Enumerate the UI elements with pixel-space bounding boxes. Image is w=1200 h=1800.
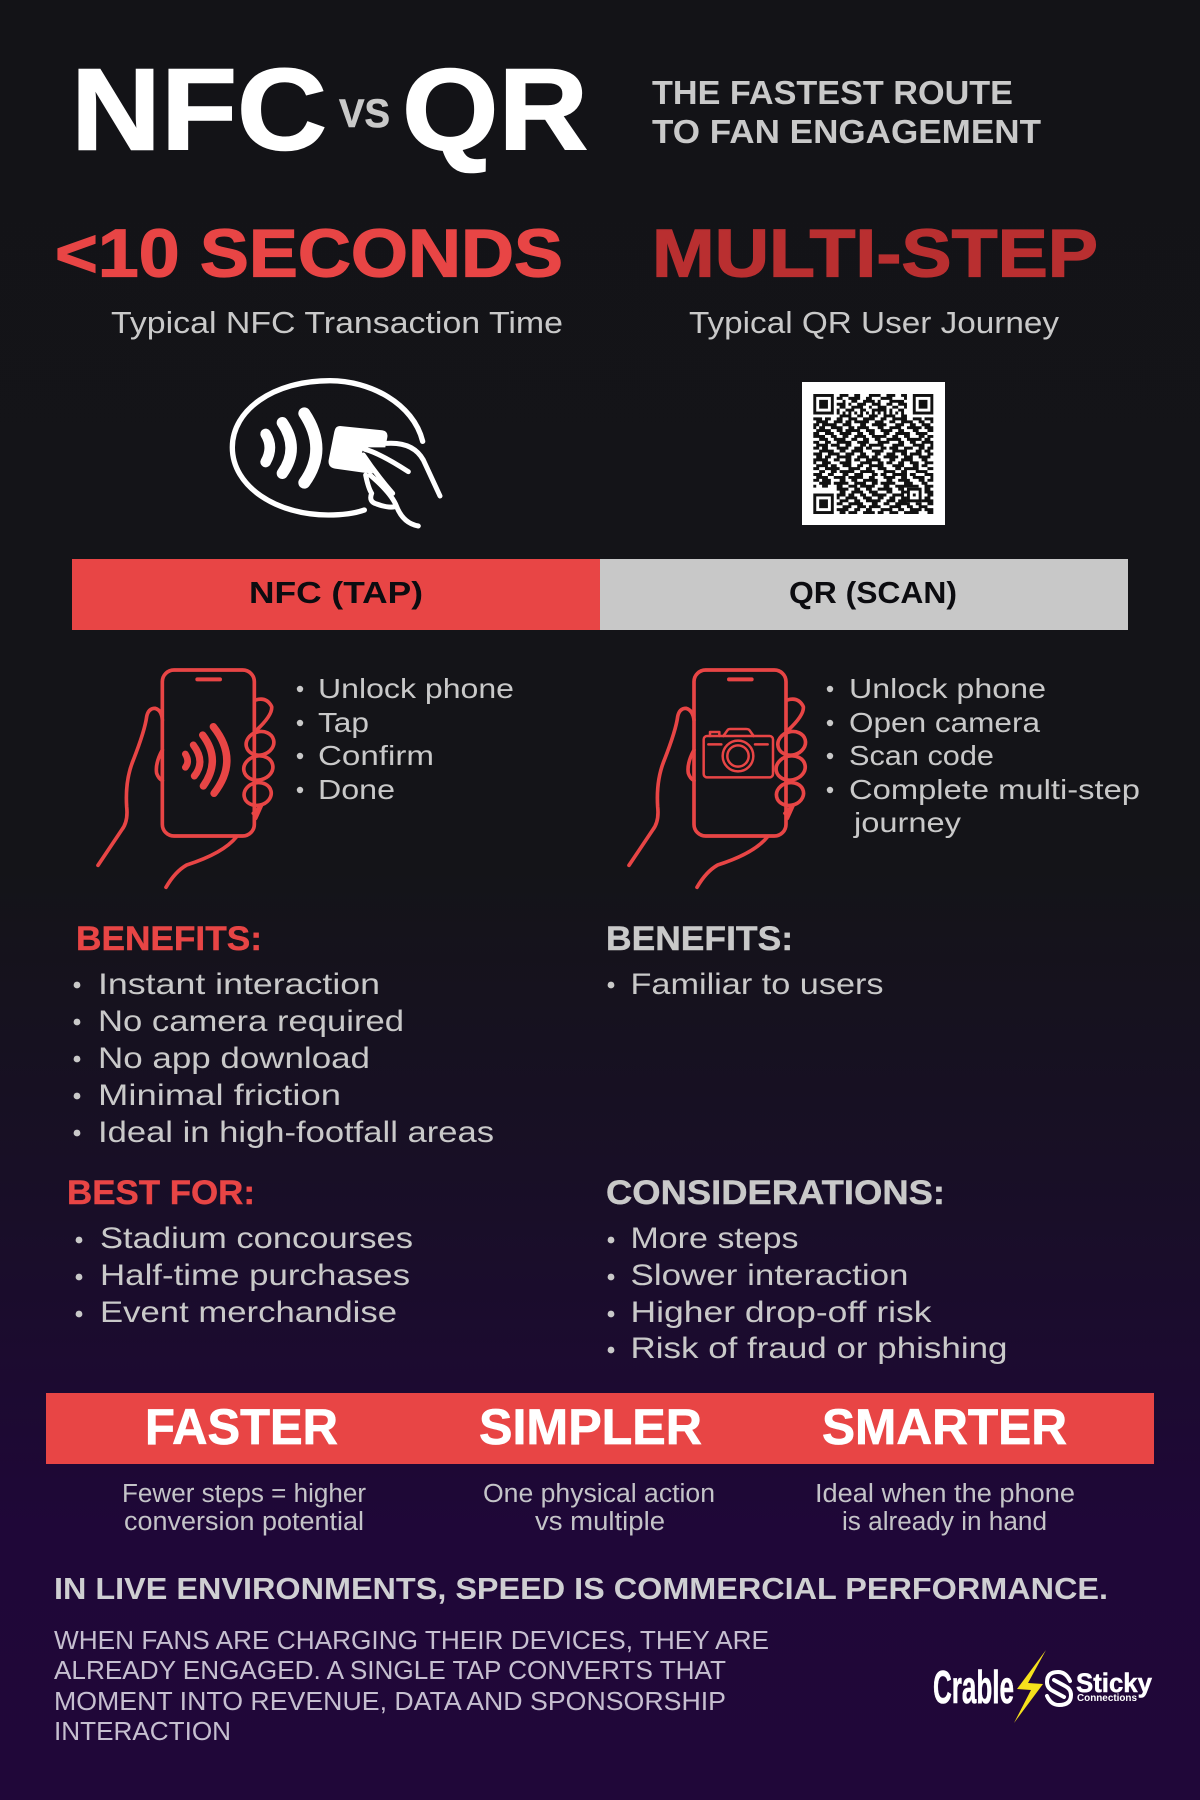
panel: considerations: Risk of fraud or phishing bbox=[630, 1332, 1008, 1365]
list: QR steps: Unlock phone bbox=[849, 673, 1046, 704]
panel: NFC benefits: Ideal in high-footfall areas bbox=[98, 1116, 494, 1149]
icon: hand holding phone with NFC waves bbox=[98, 670, 277, 887]
stat: QR journey bbox=[652, 216, 1098, 340]
caption: simpler: One physical action bbox=[483, 1480, 715, 1508]
title: NFC bbox=[71, 44, 327, 174]
caption: smarter: is already in hand bbox=[842, 1508, 1047, 1536]
caption: simpler: vs multiple bbox=[535, 1508, 665, 1536]
panel: considerations: CONSIDERATIONS: bbox=[606, 1174, 945, 1212]
logos: Crable and Sticky Connections bbox=[933, 1650, 1152, 1723]
title bbox=[71, 44, 588, 174]
stat: NFC time: Typical NFC Transaction Time bbox=[111, 305, 563, 340]
list: NFC steps: Unlock phone bbox=[318, 673, 514, 704]
icon: hand holding phone with camera bbox=[629, 670, 808, 887]
comparison header bar: NFC (TAP) bbox=[249, 575, 423, 610]
panel: NFC benefits: No app download bbox=[98, 1042, 370, 1075]
stat: NFC time: <10 SECONDS bbox=[55, 216, 563, 292]
panel: NFC benefits: No camera required bbox=[98, 1005, 404, 1038]
list: NFC steps: Confirm bbox=[318, 740, 434, 771]
panel: NFC benefits: Instant interaction bbox=[98, 968, 380, 1001]
title: QR bbox=[402, 44, 588, 174]
body paragraph bbox=[54, 1625, 769, 1746]
panel: NFC benefits: Minimal friction bbox=[98, 1079, 341, 1112]
body paragraph: WHEN FANS ARE CHARGING THEIR DEVICES, THEY ARE bbox=[54, 1625, 769, 1655]
caption: faster bbox=[122, 1480, 367, 1536]
stat: QR journey: Typical QR User Journey bbox=[689, 305, 1060, 340]
stat: QR journey: MULTI-STEP bbox=[652, 216, 1098, 292]
body paragraph: ALREADY ENGAGED. A SINGLE TAP CONVERTS THAT bbox=[54, 1655, 726, 1685]
headline statement: IN LIVE ENVIRONMENTS, SPEED IS COMMERCIAL PERFORMANCE. bbox=[54, 1571, 1108, 1606]
caption: smarter: Ideal when the phone bbox=[815, 1480, 1075, 1508]
logos: Crable and Sticky Connections: Sticky bbox=[1076, 1668, 1152, 1698]
comparison header bar bbox=[72, 559, 1128, 630]
banner: faster simpler smarter bbox=[46, 1393, 1154, 1464]
panel: best for: BEST FOR: bbox=[67, 1174, 255, 1212]
list: NFC steps bbox=[297, 673, 514, 805]
list: NFC steps: Tap bbox=[318, 707, 369, 738]
list: QR steps: Complete multi-step bbox=[849, 774, 1140, 805]
QR code bbox=[802, 382, 945, 525]
title: VS bbox=[339, 92, 390, 136]
logos: Crable and Sticky Connections: Connections bbox=[1077, 1693, 1137, 1704]
panel: considerations: More steps bbox=[630, 1222, 798, 1255]
panel: considerations: Slower interaction bbox=[630, 1259, 908, 1292]
caption: faster: Fewer steps = higher bbox=[122, 1480, 367, 1508]
banner: faster simpler smarter: SMARTER bbox=[822, 1399, 1067, 1455]
subtitle bbox=[652, 74, 1041, 150]
panel: QR benefits bbox=[606, 920, 884, 1001]
list: QR steps bbox=[827, 673, 1140, 838]
icon: contactless card tap bbox=[232, 381, 440, 526]
body paragraph: MOMENT INTO REVENUE, DATA AND SPONSORSHIP bbox=[54, 1686, 726, 1716]
subtitle: THE FASTEST ROUTE bbox=[652, 74, 1013, 111]
caption: simpler bbox=[483, 1480, 715, 1536]
panel: considerations bbox=[606, 1174, 1008, 1365]
panel: best for: Stadium concourses bbox=[100, 1222, 413, 1255]
list: QR steps: Open camera bbox=[849, 707, 1040, 738]
panel: QR benefits: BENEFITS: bbox=[606, 920, 793, 958]
list: NFC steps: Done bbox=[318, 774, 395, 805]
panel: best for bbox=[67, 1174, 413, 1329]
stat: NFC time bbox=[55, 216, 563, 340]
panel: NFC benefits: BENEFITS: bbox=[76, 920, 262, 958]
list: QR steps: Scan code bbox=[849, 740, 994, 771]
list: QR steps: journey bbox=[853, 807, 961, 838]
body paragraph: INTERACTION bbox=[54, 1716, 231, 1746]
panel: NFC benefits bbox=[74, 920, 494, 1149]
panel: best for: Half-time purchases bbox=[100, 1259, 410, 1292]
comparison header bar: QR (SCAN) bbox=[789, 575, 957, 610]
caption: faster: conversion potential bbox=[124, 1508, 364, 1536]
banner: faster simpler smarter: SIMPLER bbox=[479, 1399, 702, 1455]
panel: best for: Event merchandise bbox=[100, 1296, 397, 1329]
caption: smarter bbox=[815, 1480, 1075, 1536]
banner: faster simpler smarter: FASTER bbox=[145, 1399, 338, 1455]
panel: considerations: Higher drop-off risk bbox=[630, 1296, 933, 1329]
panel: QR benefits: Familiar to users bbox=[630, 968, 884, 1001]
subtitle: TO FAN ENGAGEMENT bbox=[652, 113, 1041, 150]
logos: Crable and Sticky Connections: Crable bbox=[933, 1661, 1014, 1713]
